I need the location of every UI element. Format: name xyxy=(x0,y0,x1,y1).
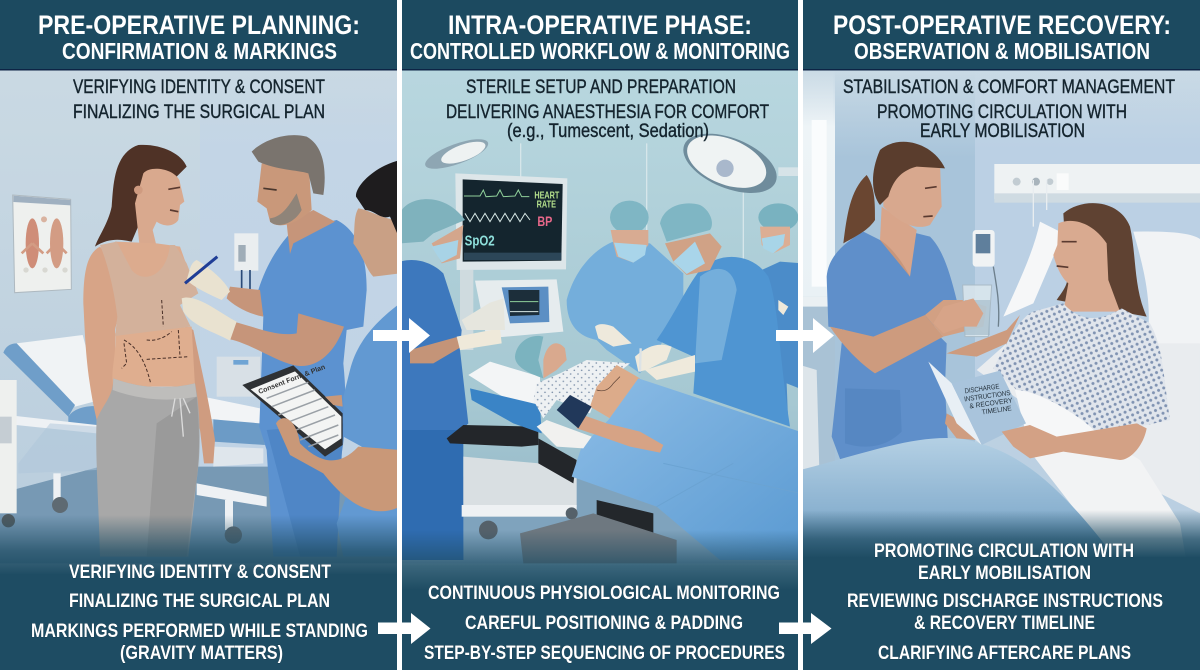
patient xyxy=(468,336,640,433)
top text: post-operative: EARLY MOBILISATION xyxy=(920,120,1085,142)
tablet: consent form xyxy=(242,364,343,457)
middle surgeon xyxy=(567,201,683,373)
far nurse xyxy=(758,203,798,426)
sterile drape xyxy=(572,378,800,560)
top text: pre-operative: FINALIZING THE SURGICAL PLAN xyxy=(73,101,325,123)
room background xyxy=(803,70,1200,549)
discharge booklet xyxy=(928,362,1026,445)
bottom text: intra-operative xyxy=(424,582,785,664)
panel: intra-operative phase xyxy=(402,70,798,670)
bottom fade xyxy=(402,530,798,590)
arrow: lower intra to post xyxy=(779,613,832,644)
bottom text: pre-operative xyxy=(31,561,368,664)
illustration: recovery ward xyxy=(800,70,1200,563)
top text: intra-operative: (e.g., Tumescent, Sedation) xyxy=(507,120,709,142)
vital signs monitor xyxy=(973,230,999,327)
wall unit xyxy=(234,233,258,293)
arrow: upper intra to post xyxy=(776,318,834,353)
tablet: consent form: Consent Form & Plan xyxy=(258,364,326,396)
bottom text: pre-operative: MARKINGS PERFORMED WHILE STANDING xyxy=(31,620,368,642)
arrow: upper pre to intra xyxy=(373,318,430,353)
surgical lights xyxy=(425,134,798,193)
top text: pre-operative: VERIFYING IDENTITY & CONSENT xyxy=(73,76,325,98)
bottom text: pre-operative: FINALIZING THE SURGICAL PLAN xyxy=(69,590,330,612)
water glass xyxy=(962,284,992,338)
bottom text: intra-operative: STEP-BY-STEP SEQUENCING OF PROCEDURES xyxy=(424,642,785,664)
patient monitor: RATE xyxy=(537,199,556,210)
bottom text: intra-operative: CAREFUL POSITIONING & PADDING xyxy=(465,612,743,634)
hands xyxy=(945,413,977,440)
panel: post-operative recovery xyxy=(803,70,1200,670)
right surgeon xyxy=(635,203,790,427)
heading: pre-operative: CONFIRMATION & MARKINGS xyxy=(62,38,337,64)
top text: intra-operative xyxy=(446,76,769,142)
bottom text: post-operative: CLARIFYING AFTERCARE PLANS xyxy=(878,642,1131,664)
pillows xyxy=(977,222,1200,513)
surgeon xyxy=(182,135,367,557)
anatomy poster xyxy=(13,195,71,293)
left nurse xyxy=(400,199,505,560)
top text: intra-operative: DELIVERING ANAESTHESIA FOR COMFORT xyxy=(446,101,769,123)
top text: intra-operative: STERILE SETUP AND PREPARATION xyxy=(466,76,736,98)
patient monitor xyxy=(455,173,567,270)
bedside unit xyxy=(803,366,820,470)
bottom text: post-operative: PROMOTING CIRCULATION WITH xyxy=(874,540,1134,562)
heading: intra-operative xyxy=(410,10,790,64)
top text: post-operative: PROMOTING CIRCULATION WITH xyxy=(877,101,1127,123)
patient xyxy=(993,203,1170,457)
headwall panel xyxy=(994,164,1200,227)
table and equipment xyxy=(447,425,677,563)
heading: intra-operative: INTRA-OPERATIVE PHASE: xyxy=(448,10,752,40)
patient monitor: SpO2 xyxy=(465,234,495,250)
heading: pre-operative: PRE-OPERATIVE PLANNING: xyxy=(38,10,360,40)
bottom text: pre-operative: VERIFYING IDENTITY & CONSENT xyxy=(69,561,331,583)
bottom fade xyxy=(803,510,1200,558)
room background xyxy=(0,70,397,564)
top text: post-operative xyxy=(843,76,1175,142)
heading: pre-operative xyxy=(38,10,360,64)
illustration: marking scene xyxy=(0,135,397,563)
illustration: operating theatre xyxy=(400,122,803,563)
discharge booklet: DISCHARGE xyxy=(964,383,1000,395)
room background xyxy=(402,70,798,583)
bottom text: post-operative: & RECOVERY TIMELINE xyxy=(914,612,1095,634)
anaesthesia machine xyxy=(460,270,563,350)
bottom text: post-operative xyxy=(847,540,1163,664)
header bars xyxy=(0,0,1200,70)
side cabinet xyxy=(0,380,17,527)
woman xyxy=(83,145,215,557)
discharge booklet: INSTRUCTIONS xyxy=(964,390,1011,403)
nurse with tablet xyxy=(242,160,400,557)
heading: post-operative xyxy=(833,10,1171,64)
heading: intra-operative: CONTROLLED WORKFLOW & MONITORING xyxy=(410,38,790,64)
patient monitor: BP xyxy=(537,213,552,229)
nurse xyxy=(827,142,1020,463)
panel: pre-operative planning xyxy=(0,70,397,670)
discharge booklet: & RECOVERY xyxy=(969,397,1013,410)
bottom fade xyxy=(0,515,397,575)
patient arm and cuff xyxy=(537,395,663,453)
blanket and sheet xyxy=(803,438,1184,549)
top text: pre-operative xyxy=(73,76,325,123)
bottom text: intra-operative: CONTINUOUS PHYSIOLOGICAL MONITORING xyxy=(428,582,780,604)
exam bed xyxy=(3,335,267,544)
arrow: lower pre to intra xyxy=(378,613,430,644)
bottom text: pre-operative: (GRAVITY MATTERS) xyxy=(120,642,283,664)
patient monitor: HEART xyxy=(534,190,559,201)
discharge booklet: TIMELINE xyxy=(981,405,1012,416)
bottom text: post-operative: EARLY MOBILISATION xyxy=(918,562,1091,584)
